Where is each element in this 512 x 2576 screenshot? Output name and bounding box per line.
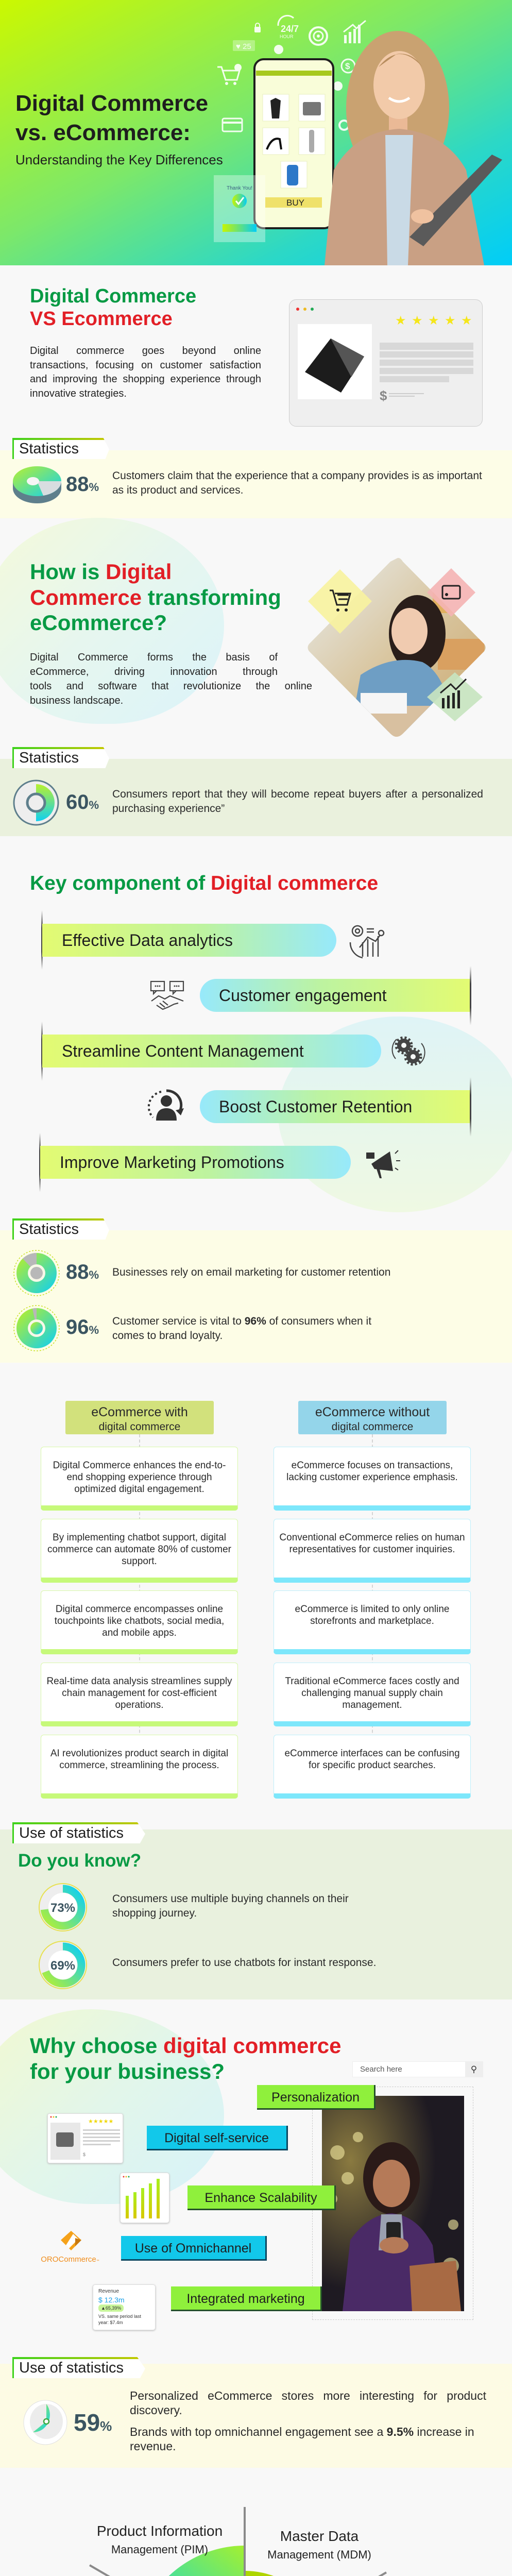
paragraph section 3: eCommerce, driving innovation through: [30, 666, 278, 677]
heading: How is Digital Commerce transforming eCommerce?: Commerce transforming: [30, 585, 281, 609]
hero banner: Thank You!: [227, 185, 252, 191]
comparison column: eCommerce without digital commerce: [274, 1401, 471, 1799]
stat 88% number: 88%: [66, 1261, 99, 1283]
label: Personalization: [257, 2085, 376, 2110]
revenue card: VS. same period last: [98, 2314, 141, 2319]
card without 1: eCommerce focuses on transactions, lacking customer experience emphasis.: [286, 1460, 458, 1483]
mini product card: [47, 2113, 123, 2163]
statistics tab 2: [12, 747, 109, 768]
card with 3: [41, 1590, 238, 1654]
diamond photo with icons: [308, 557, 485, 737]
hero title: [15, 91, 223, 167]
heading: How is Digital Commerce transforming eCommerce?: [30, 560, 281, 635]
card with 4: Real-time data analysis streamlines supply chain management for cost-efficient operations.: [46, 1676, 232, 1710]
hero title: Digital Commerce: [15, 91, 208, 116]
component 4: Boost Customer Retention: Boost Customer Retention: [219, 1097, 412, 1116]
statistics tab 1: [12, 438, 109, 459]
label: Enhance Scalability: [187, 2185, 336, 2210]
OROCommerce logo: OROCommerce™: [41, 2255, 99, 2264]
use of statistics tab 4: Use of statistics: [19, 1825, 124, 1841]
section heading: Digital Commerce VS Ecommerce: VS Ecommerce: [30, 308, 173, 330]
stat 73% text: [112, 1893, 349, 1919]
comparison column: eCommerce with digital commerce: [41, 1401, 238, 1799]
stat 69% donut: 69%: [50, 1959, 75, 1973]
tools of digital commerce diagram: [89, 2507, 387, 2576]
label: Digital self-service: Digital self-service: [164, 2131, 269, 2145]
icon: handshake: [150, 981, 184, 1010]
icon: megaphone: [366, 1150, 400, 1178]
intro paragraph: Digital commerce goes beyond online transactions, focusing on customer satisfaction and improving the shopping experience through innovative strategies.: [30, 345, 261, 399]
dashed frame and photo: [312, 2087, 473, 2320]
label: PIM: Management (PIM): [111, 2543, 208, 2556]
component 5: Improve Marketing Promotions: Improve Marketing Promotions: [60, 1153, 284, 1172]
browser mockup illustration: ★: [412, 313, 423, 328]
use of statistics tab 5: [12, 2357, 145, 2378]
paragraph section 3: [30, 652, 312, 706]
stat 69% text: Consumers prefer to use chatbots for instant response.: [112, 1957, 376, 1969]
label: Integrated marketing: [171, 2286, 322, 2311]
background blob section 3: [0, 518, 224, 724]
stat 88% pie: [13, 466, 61, 503]
card without 5: eCommerce interfaces can be confusing for specific product searches.: [284, 1748, 460, 1771]
heading: How is Digital Commerce transforming eCommerce?: eCommerce?: [30, 611, 167, 635]
component 1: Effective Data analytics: [41, 911, 384, 969]
label: MDM: Management (MDM): [267, 2548, 371, 2561]
card with 2: By implementing chatbot support, digital commerce can automate 80% of customer support.: [47, 1532, 231, 1567]
component 5: Improve Marketing Promotions: [39, 1133, 400, 1191]
revenue card: ▲65,39%: [101, 2306, 121, 2311]
browser mockup illustration: [289, 299, 483, 427]
header: with: [65, 1401, 214, 1434]
mini chart card: [120, 2173, 169, 2223]
browser mockup illustration: ★: [445, 313, 456, 328]
paragraph section 3: business landscape.: [30, 695, 123, 706]
revenue card: Revenue: [98, 2289, 119, 2294]
component 3: Streamline Content Management: Streamline Content Management: [62, 1042, 304, 1060]
component 4: Boost Customer Retention: [147, 1078, 471, 1136]
stat 96% donut: [13, 1305, 60, 1351]
label: PIM: Product Information: [97, 2523, 223, 2539]
heading: Why choose digital commerce for your business?: [30, 2033, 342, 2083]
search box: Search here: [360, 2065, 402, 2074]
background blob key components: [278, 1016, 512, 1212]
statistics tab 1: Statistics: [19, 440, 79, 457]
label: Digital self-service: [147, 2126, 288, 2150]
heading: Do you know?: Do you know?: [18, 1851, 141, 1871]
icon: gears: [391, 1037, 425, 1065]
section heading: Digital Commerce VS Ecommerce: [30, 285, 196, 330]
stat 96% text: [112, 1315, 371, 1342]
card with 2: [41, 1519, 238, 1583]
browser mockup illustration: $: [380, 388, 387, 403]
stats band 3: [0, 1230, 512, 1363]
component 3: Streamline Content Management: [41, 1022, 425, 1080]
stat 96% text: comes to brand loyalty.: [112, 1330, 223, 1342]
header: without: eCommerce without: [315, 1405, 430, 1419]
stat 59% text: Personalized eCommerce stores more interesting for product discovery.: [130, 2389, 486, 2417]
stat 88% donut: [13, 1250, 60, 1296]
stat 59% text: Brands with top omnichannel engagement see a 9.5% increase in revenue.: [130, 2425, 474, 2453]
label: Integrated marketing: Integrated marketing: [186, 2292, 305, 2306]
heading: Why choose digital commerce for your business?: Why choose digital commerce: [30, 2033, 342, 2058]
statistics tab 3: [12, 1218, 109, 1240]
card without 4: [274, 1663, 471, 1726]
label: Enhance Scalability: Enhance Scalability: [204, 2191, 317, 2205]
stat 73% text: Consumers use multiple buying channels on their: [112, 1893, 349, 1905]
stats band 4: [0, 1829, 512, 1999]
revenue card: [93, 2284, 156, 2330]
hero title: vs. eCommerce:: [15, 120, 191, 145]
stat 59% donut: [24, 2400, 67, 2445]
card without 2: [274, 1519, 471, 1583]
stat 73% donut: [39, 1883, 87, 1931]
heading: Key component of Digital commerce: Key component of Digital commerce: [30, 872, 378, 894]
browser mockup illustration: ★: [428, 313, 439, 328]
card without 3: eCommerce is limited to only online storefronts and marketplace.: [295, 1604, 449, 1626]
hero title: Understanding the Key Differences: [15, 152, 223, 167]
component 2: Customer engagement: [150, 967, 471, 1024]
stats band 2: [0, 759, 512, 836]
mini product card: $: [83, 2152, 86, 2157]
header: with: eCommerce with: [91, 1405, 188, 1419]
component 1: Effective Data analytics: Effective Data analytics: [62, 931, 233, 950]
OROCommerce logo: [41, 2231, 99, 2264]
label: MDM: [267, 2528, 371, 2561]
icon: customer retention: [147, 1089, 184, 1121]
component 2: Customer engagement: Customer engagement: [219, 986, 387, 1005]
card without 2: Conventional eCommerce relies on human representatives for customer inquiries.: [279, 1532, 465, 1555]
revenue card: $ 12.3m: [98, 2296, 125, 2304]
search box: ⚲: [471, 2064, 477, 2074]
browser mockup illustration: ★: [461, 313, 472, 328]
card without 1: [274, 1447, 471, 1511]
paragraph section 3: Digital Commerce forms the basis of: [30, 652, 278, 663]
heading: How is Digital Commerce transforming eCommerce?: How is Digital: [30, 560, 172, 584]
background blob why section: [0, 2009, 224, 2204]
label: Personalization: Personalization: [271, 2090, 360, 2105]
section heading: Digital Commerce VS Ecommerce: Digital Commerce: [30, 285, 196, 307]
hero banner: HOUR: [280, 34, 294, 39]
label: PIM: [97, 2523, 223, 2556]
stat 88% text: Businesses rely on email marketing for customer retention: [112, 1266, 390, 1278]
heading: Why choose digital commerce for your business?: for your business?: [30, 2059, 225, 2083]
header: without: digital commerce: [332, 1421, 413, 1433]
mini product card: ★★★★★: [88, 2118, 113, 2125]
stat 88% number: 88%: [66, 473, 99, 496]
stat 88% text: Customers claim that the experience that a company provides is as important as its product and services.: [112, 470, 482, 496]
label: Use of Omnichannel: [121, 2236, 267, 2261]
hero banner: BUY: [286, 198, 304, 208]
paragraph section 3: tools and software that revolutionize the online: [30, 681, 312, 692]
stat 73% donut: 73%: [50, 1901, 75, 1915]
search box: [352, 2061, 483, 2077]
label: MDM: Master Data: [280, 2528, 359, 2544]
browser mockup illustration: ★: [395, 313, 406, 328]
stat 60% number: 60%: [66, 791, 99, 814]
hero banner: 24/7: [281, 24, 299, 34]
revenue card: year: $7.4m: [98, 2320, 123, 2325]
stat 73% text: shopping journey.: [112, 1907, 197, 1919]
card with 1: [41, 1447, 238, 1511]
header: with: digital commerce: [99, 1421, 180, 1433]
stat 69% donut: [39, 1941, 87, 1989]
card without 5: [274, 1735, 471, 1799]
card without 4: Traditional eCommerce faces costly and challenging manual supply chain management.: [285, 1676, 459, 1710]
stat 59% text: [130, 2389, 486, 2453]
card with 5: AI revolutionizes product search in digital commerce, streamlining the process.: [50, 1748, 228, 1771]
stat 96% number: 96%: [66, 1316, 99, 1338]
statistics tab 2: Statistics: [19, 750, 79, 766]
stats band 5: [0, 2364, 512, 2468]
card without 3: [274, 1590, 471, 1654]
use of statistics tab 5: Use of statistics: [19, 2360, 124, 2376]
icon: data analytics: [349, 925, 384, 958]
stat 60% text: Consumers report that they will become repeat buyers after a personalized purchasing experience”: [112, 788, 483, 815]
label: Use of Omnichannel: Use of Omnichannel: [135, 2241, 251, 2256]
stat 59% number: 59%: [74, 2409, 112, 2436]
stat 60% donut: [13, 780, 59, 825]
use of statistics tab 4: [12, 1822, 145, 1843]
hero banner: $: [345, 61, 350, 71]
stats band 1: [0, 450, 512, 518]
stat 96% text: Customer service is vital to 96% of consumers when it: [112, 1315, 371, 1327]
card with 3: Digital commerce encompasses online touchpoints like chatbots, social media, and mobile apps.: [55, 1604, 224, 1638]
hero banner: [0, 0, 512, 265]
header: without: [298, 1401, 447, 1434]
card with 4: [41, 1663, 238, 1726]
hero banner: ♥ 25: [236, 42, 251, 51]
card with 1: Digital Commerce enhances the end-to-end shopping experience through optimized digital engagement.: [53, 1460, 226, 1495]
card with 5: [41, 1735, 238, 1799]
statistics tab 3: Statistics: [19, 1221, 79, 1238]
